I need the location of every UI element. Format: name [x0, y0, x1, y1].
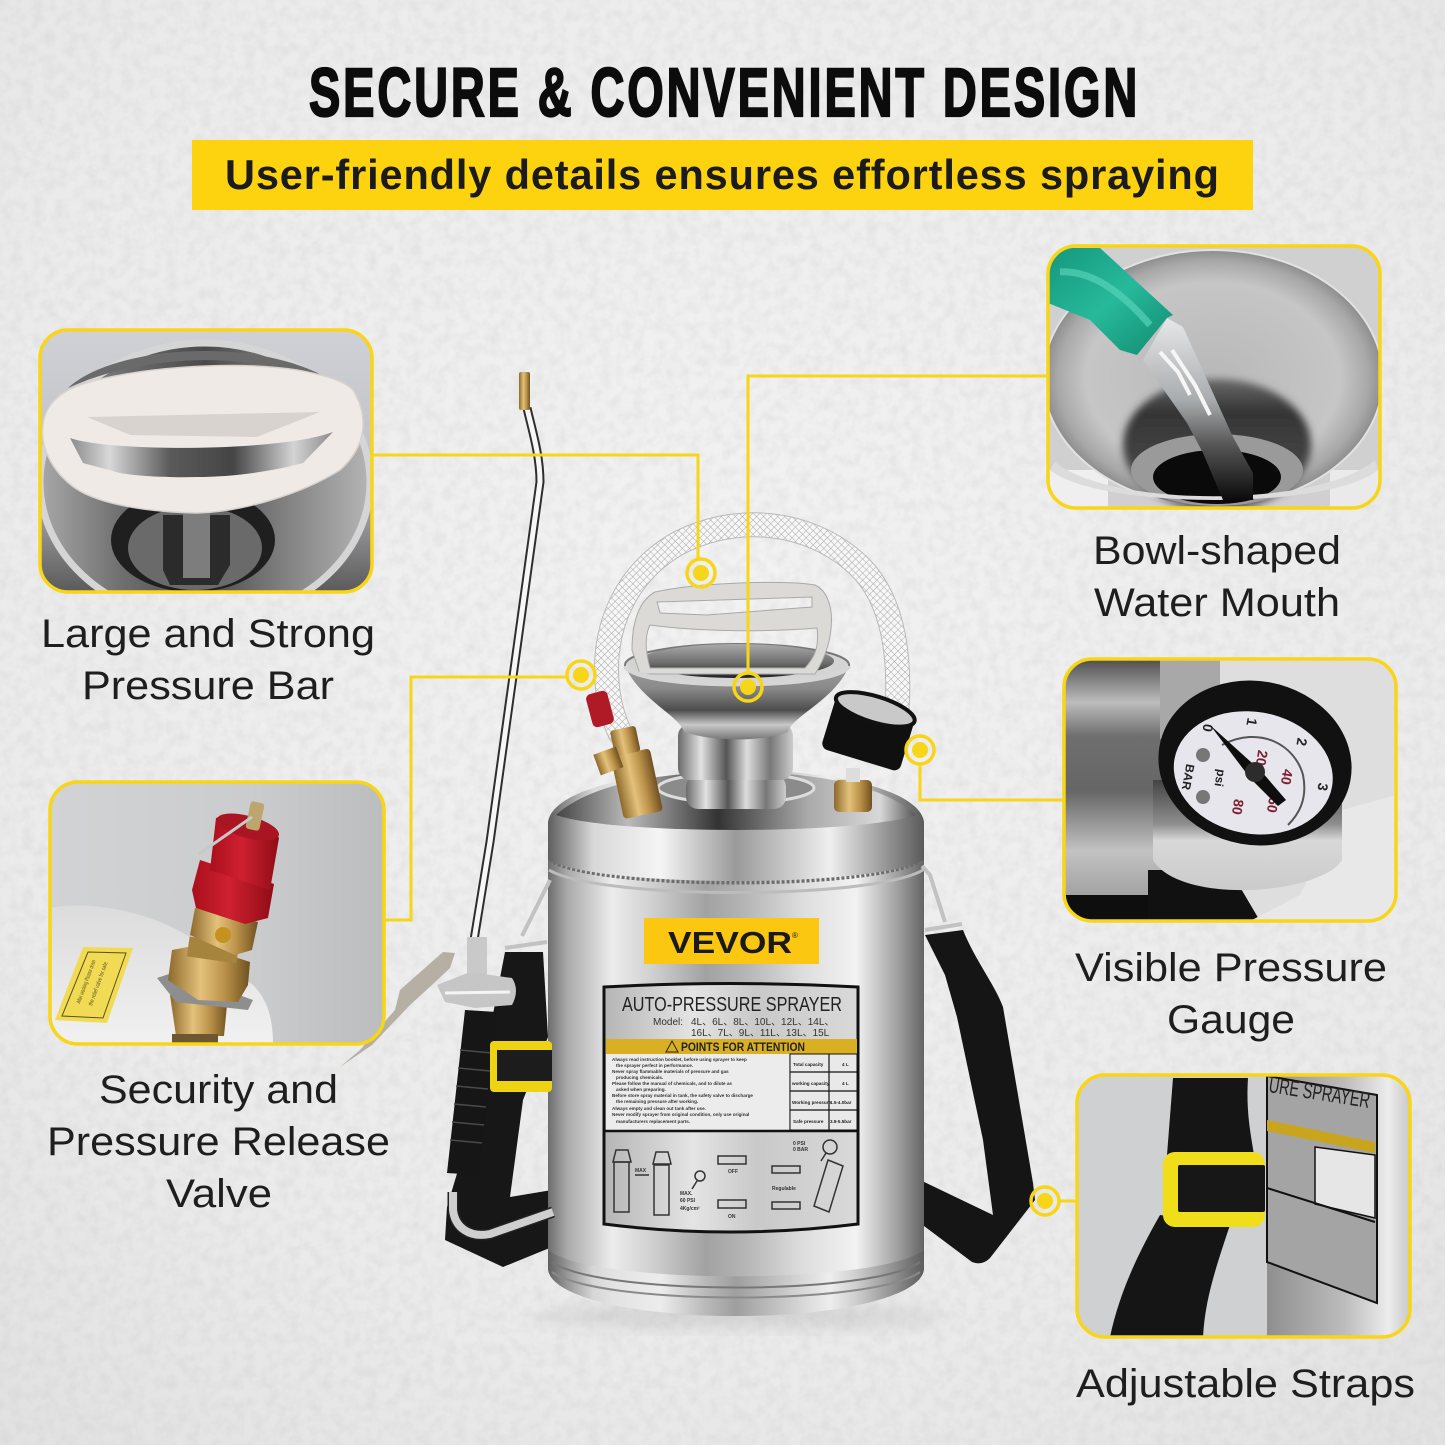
instruction text: Never spray flammable materials of pressure and gas	[612, 1069, 729, 1074]
water stream	[1143, 318, 1253, 500]
callout dots	[567, 559, 1059, 1215]
caption: pressure bar: Large and Strong	[41, 612, 375, 656]
dot: water mouth	[734, 673, 762, 701]
strap webbing	[1167, 1078, 1254, 1155]
gauge dial numbers: 0	[1199, 723, 1217, 733]
spec table: 1.5-4.0bar	[830, 1100, 852, 1105]
braided hose	[606, 525, 898, 733]
caption: straps: Adjustable Straps	[1076, 1362, 1415, 1406]
tank body	[548, 830, 924, 1316]
brass stem	[170, 995, 228, 1036]
pictogram captions: ON	[728, 1214, 736, 1220]
gauge dial numbers: 60	[1264, 796, 1282, 814]
points for attention band	[606, 1039, 857, 1054]
pictogram captions: 4Kg/cm²	[680, 1206, 700, 1212]
gauge dial numbers: 3	[1314, 782, 1332, 792]
title: SECURE & CONVENIENT DESIGN	[309, 54, 1137, 131]
callout lines	[372, 376, 1077, 1201]
instruction text: the sprayer perfect in performance.	[616, 1063, 693, 1068]
brass nut	[168, 945, 250, 1002]
gauge dial numbers: psi	[1212, 768, 1228, 788]
thread	[187, 937, 239, 963]
gauge dial numbers: 2	[1293, 737, 1311, 747]
caption: release valve	[47, 1068, 390, 1216]
gauge dial numbers	[1179, 717, 1332, 816]
left shoulder strap	[445, 952, 552, 1267]
spec table	[790, 1054, 857, 1130]
red cap	[192, 860, 274, 924]
model list: Model:	[653, 1017, 683, 1028]
bowl front rim	[625, 666, 849, 684]
instruction text: Please follow the manual of chemicals, and to dilute as	[612, 1081, 732, 1086]
brass body with hole	[190, 908, 258, 955]
safety valve with brass fitting	[585, 690, 663, 819]
gun trigger	[340, 952, 455, 1067]
product label	[604, 984, 858, 1232]
pictogram captions: Regulable	[772, 1186, 796, 1192]
panel: water mouth photo	[1043, 246, 1383, 511]
caption: pressure bar: Pressure Bar	[82, 664, 334, 708]
caption: release valve: Pressure Release	[47, 1120, 390, 1164]
pressure gauge	[821, 685, 918, 772]
strap buckle	[490, 1041, 552, 1092]
spray wand	[474, 372, 540, 940]
dot: gauge	[906, 736, 934, 764]
instruction text: producing chemicals.	[616, 1075, 663, 1080]
instruction text: asked when preparing.	[616, 1087, 666, 1092]
dot: release valve	[567, 661, 595, 689]
hose from gun	[453, 1192, 553, 1235]
gauge dial numbers: 20	[1253, 749, 1271, 767]
panel: pressure bar photo	[40, 330, 372, 621]
dial screws	[1196, 748, 1210, 762]
strap hooks	[505, 866, 962, 948]
gun upper tube	[467, 937, 487, 979]
warning sticker: the relief valve for safe	[88, 961, 110, 1007]
pictogram captions: 60 PSI	[680, 1198, 696, 1204]
pictogram captions	[635, 1141, 808, 1220]
gauge bezel and dial	[1158, 680, 1352, 846]
caption: release valve: Security and	[99, 1068, 338, 1112]
caption: water mouth	[1093, 529, 1341, 625]
green hose	[1048, 248, 1173, 355]
dot: pressure bar	[687, 559, 715, 587]
VEVOR badge: ®	[792, 931, 798, 940]
spray gun	[340, 937, 553, 1235]
pin and wire	[245, 801, 265, 831]
caption: pressure bar	[41, 612, 375, 708]
spec table: working capacity	[791, 1081, 830, 1086]
instruction text: Always empty and clean out tank after use.	[612, 1106, 706, 1111]
gun body	[437, 972, 516, 1008]
gauge dial numbers: 40	[1278, 768, 1296, 786]
spec table: 3.8-5.5bar	[830, 1119, 852, 1124]
model list	[653, 1017, 834, 1039]
strap label band	[1267, 1120, 1375, 1153]
sprayer product	[340, 372, 1035, 1316]
VEVOR badge	[644, 918, 819, 964]
gauge dial numbers: 80	[1229, 798, 1247, 816]
gun rubber grip	[447, 1010, 497, 1175]
instruction text: Never modify sprayer from original condition, only use original	[612, 1112, 749, 1117]
pictogram captions: 0 BAR	[793, 1147, 808, 1153]
gauge brass fitting	[834, 768, 872, 812]
spec table: 4 L	[842, 1081, 849, 1086]
tank lid	[548, 770, 924, 881]
spec table: 4 L	[842, 1062, 849, 1067]
caption: water mouth: Bowl-shaped	[1093, 529, 1341, 573]
bowl water mouth	[625, 644, 849, 740]
VEVOR badge: VEVOR	[668, 925, 792, 960]
white handle cap	[42, 366, 363, 513]
model list: 4L、6L、8L、10L、12L、14L、	[691, 1017, 834, 1028]
pictogram captions: MAX	[635, 1168, 647, 1174]
panel: release valve photo	[50, 782, 384, 1044]
label title: AUTO-PRESSURE SPRAYER	[622, 994, 842, 1016]
pictogram captions: OFF	[728, 1169, 738, 1175]
warning sticker	[55, 947, 133, 1023]
yellow buckle	[1163, 1152, 1265, 1227]
subtitle banner: User-friendly details ensures effortless spraying	[225, 151, 1219, 198]
instruction text: manufacturers replacement parts.	[616, 1119, 690, 1124]
panel: pressure gauge photo	[1064, 659, 1396, 921]
strap label spec table	[1315, 1147, 1375, 1218]
spec table: Safe pressure	[793, 1119, 824, 1124]
spec table: Total capacity	[793, 1062, 824, 1067]
pictogram captions: 0 PSI	[793, 1141, 806, 1147]
model list: 16L、7L、9L、11L、13L、15L	[691, 1028, 830, 1039]
caption: pressure gauge	[1075, 946, 1387, 1042]
neck	[678, 724, 793, 780]
panel: straps photo	[1077, 1072, 1410, 1337]
needle	[1210, 725, 1286, 806]
steel washer	[157, 972, 253, 1010]
right shoulder strap	[920, 930, 1035, 1263]
caption: release valve: Valve	[166, 1172, 272, 1216]
instruction text: Always read instruction booklet, before using sprayer to keep	[612, 1057, 747, 1062]
gauge dial numbers: 1	[1243, 717, 1261, 727]
caption: water mouth: Water Mouth	[1094, 581, 1340, 625]
warning sticker: After working Please drain	[76, 959, 98, 1005]
spec table: Working pressure	[792, 1100, 831, 1105]
usage pictograms	[613, 1140, 843, 1215]
strap label text: URE SPRAYER	[1267, 1072, 1372, 1113]
dial arc	[1222, 737, 1304, 825]
pictogram captions: MAX.	[680, 1191, 693, 1197]
white tank dome	[50, 906, 273, 1044]
gauge dial numbers: BAR	[1179, 763, 1197, 791]
subtitle banner	[192, 140, 1253, 210]
pressure bar handle	[632, 582, 832, 674]
instruction text: the remaining pressure after working.	[616, 1099, 698, 1104]
points for attention band: POINTS FOR ATTENTION	[681, 1042, 805, 1054]
caption: pressure gauge: Visible Pressure	[1075, 946, 1387, 990]
dot: straps	[1031, 1187, 1059, 1215]
caption: pressure gauge: Gauge	[1167, 998, 1295, 1042]
instruction text	[606, 1054, 789, 1130]
instruction text: Before store spray material in tank, the safety valve to discharge	[612, 1093, 753, 1098]
